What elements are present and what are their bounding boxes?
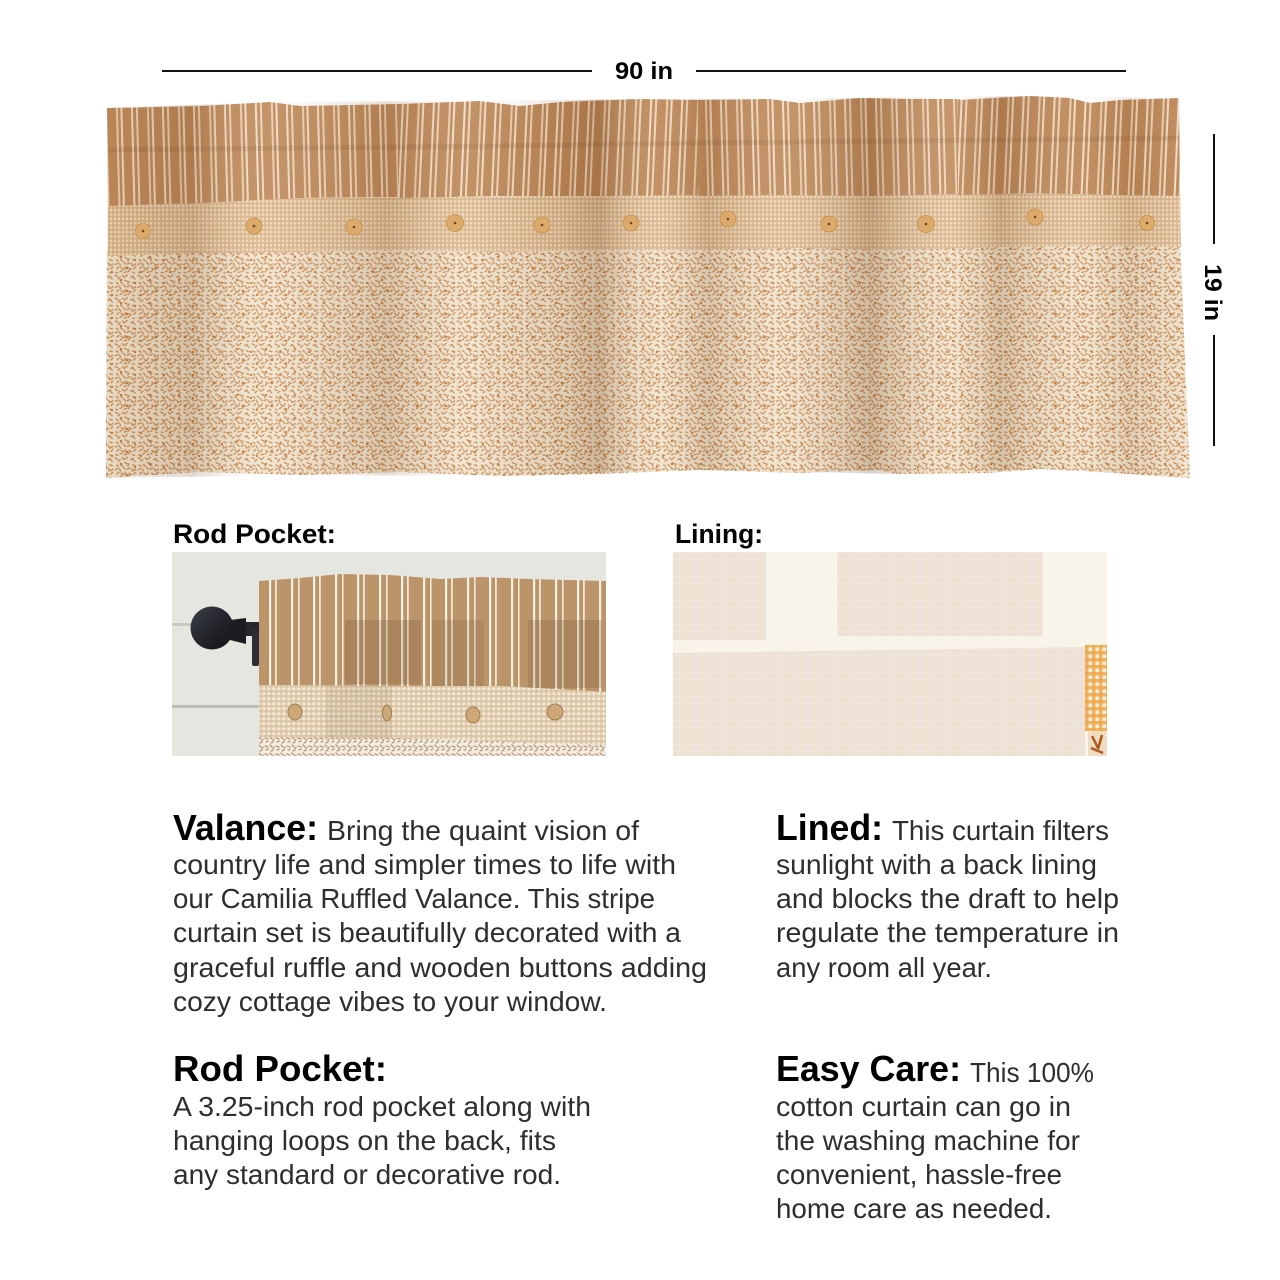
text block: Easy Care: the washing machine for (776, 1125, 1080, 1156)
rod pocket seam shading (108, 138, 1180, 150)
lining panels (673, 552, 1085, 756)
text block: Valance: graceful ruffle and wooden buttons adding (173, 952, 707, 983)
text block: Easy Care: home care as needed. (776, 1193, 1052, 1224)
photo: rod pocket detail (172, 552, 606, 756)
fabric fold shading (106, 96, 1190, 478)
curtain rod finial (190, 606, 260, 666)
text block: Easy Care: cotton curtain can go in (776, 1091, 1071, 1122)
text block: Lined: sunlight with a back lining (776, 849, 1097, 880)
heading: rod pocket photo: Rod Pocket: (173, 519, 336, 549)
text block: Easy Care: convenient, hassle-free (776, 1159, 1062, 1190)
heading: lining photo: Lining: (675, 519, 763, 549)
text block: Lined (776, 807, 1119, 983)
gingham band (108, 190, 1181, 256)
dimension: height 19 in: 19 in (1199, 264, 1226, 321)
text block: Easy Care: Easy Care: (776, 1048, 961, 1089)
text block: Rod Pocket: any standard or decorative rod. (173, 1159, 561, 1190)
text block: Lined: and blocks the draft to help (776, 883, 1119, 914)
text block: Rod Pocket: Rod Pocket: (173, 1048, 387, 1089)
floral lower panel (106, 240, 1190, 478)
gingham edge (1085, 645, 1107, 731)
floral edge (1088, 731, 1107, 756)
text block: Lined: Lined: (776, 807, 883, 848)
text block: Valance: cozy cottage vibes to your window. (173, 986, 607, 1017)
text block: Valance: our Camilia Ruffled Valance. This stripe (173, 883, 655, 914)
text block: Lined: regulate the temperature in (776, 917, 1119, 948)
buttons (288, 704, 563, 723)
text block: Valance: country life and simpler times to life with (173, 849, 676, 880)
photo: lining detail (673, 552, 1107, 756)
text block: Rod Pocket (173, 1048, 591, 1190)
text block: Rod Pocket: A 3.25-inch rod pocket along with (173, 1091, 591, 1122)
text block: Easy Care (776, 1048, 1094, 1224)
dimension: width 90 in: 90 in (615, 58, 673, 85)
wooden buttons (136, 209, 1154, 238)
text block: Lined: any room all year. (776, 952, 992, 983)
text block: Valance: Valance: (173, 807, 318, 848)
main photo: valance curtain (106, 96, 1190, 478)
text block: Valance (173, 807, 707, 1017)
text block: Valance: curtain set is beautifully decorated with a (173, 917, 682, 948)
text block: Valance: Bring the quaint vision of (327, 815, 639, 846)
text block: Easy Care: This 100% (970, 1057, 1094, 1088)
text block: Rod Pocket: hanging loops on the back, fits (173, 1125, 556, 1156)
text block: Lined: This curtain filters (892, 815, 1109, 846)
ticking stripe band (107, 96, 1180, 206)
